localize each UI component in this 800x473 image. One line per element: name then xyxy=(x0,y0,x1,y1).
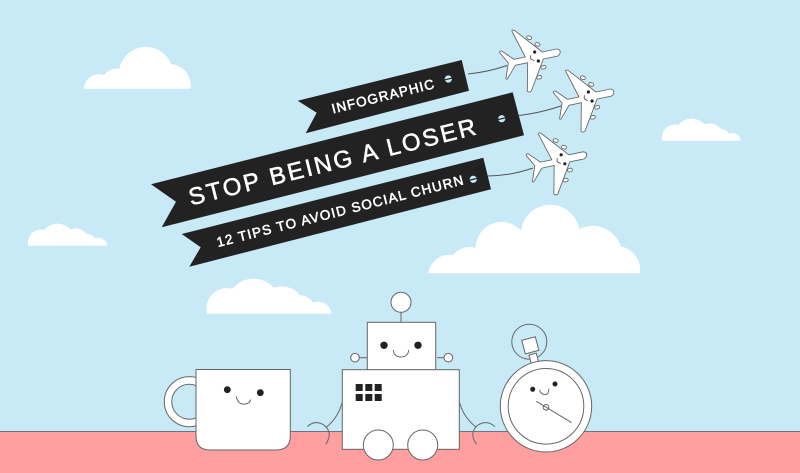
mug body xyxy=(196,370,290,450)
robot control panel xyxy=(356,384,382,401)
banner text: infographic: INFOGRAPHIC xyxy=(330,76,436,116)
robot ear: right xyxy=(437,353,453,362)
stopwatch case xyxy=(500,361,592,452)
banner eyelet xyxy=(497,114,506,123)
banner eyelet xyxy=(469,175,478,184)
plane: top xyxy=(500,30,560,92)
robot face xyxy=(380,342,422,357)
tow rope: middle plane xyxy=(519,106,561,116)
cloud: large right xyxy=(428,205,640,273)
plane: bottom xyxy=(526,133,587,195)
robot head xyxy=(367,322,436,370)
banner: infographic xyxy=(298,60,469,133)
banner text: main title: STOP BEING A LOSER xyxy=(186,114,479,211)
tow rope: top plane xyxy=(468,66,507,74)
mug handle xyxy=(164,377,214,427)
robot body xyxy=(342,370,459,449)
stopwatch face xyxy=(530,382,558,395)
cloud: lower centre xyxy=(206,279,332,314)
mug face xyxy=(224,386,264,404)
robot left arm xyxy=(307,402,342,444)
character: robot xyxy=(307,292,495,460)
stopwatch crown xyxy=(522,337,539,354)
cloud: top right xyxy=(662,119,741,141)
stopwatch stem xyxy=(529,353,539,364)
stopwatch dial xyxy=(508,368,584,444)
plane: middle xyxy=(553,70,614,132)
banner text: subtitle: 12 TIPS TO AVOID SOCIAL CHURN xyxy=(215,173,465,250)
character: mug xyxy=(164,370,290,450)
tow rope: bottom plane xyxy=(487,168,533,176)
robot wheel: right xyxy=(408,430,438,460)
robot ear: left xyxy=(351,353,367,362)
robot right arm xyxy=(459,402,495,444)
banner: main title xyxy=(151,92,524,227)
character: stopwatch xyxy=(500,324,592,452)
banner eyelet xyxy=(444,75,453,83)
banner: subtitle xyxy=(182,158,491,267)
stopwatch hands xyxy=(536,401,572,423)
ground xyxy=(0,432,800,473)
robot wheel: left xyxy=(363,430,393,460)
robot antenna xyxy=(391,292,411,322)
cloud: left xyxy=(28,224,107,246)
cloud: top left xyxy=(84,47,191,89)
stopwatch ring xyxy=(512,324,547,359)
